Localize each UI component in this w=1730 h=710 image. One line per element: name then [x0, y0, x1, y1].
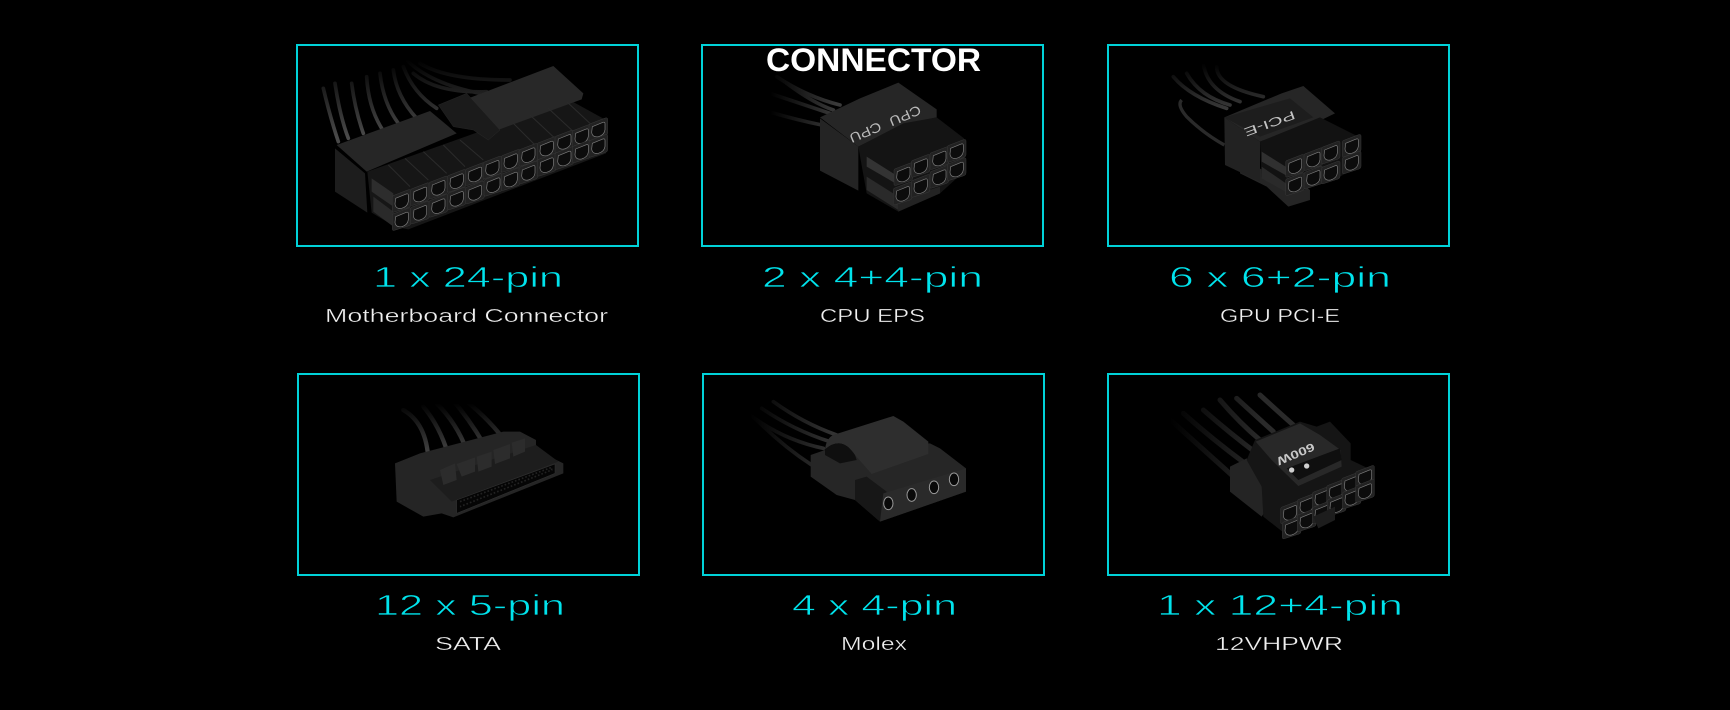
image frame: [298, 374, 639, 575]
panel: CPU EPS connector: [702, 42, 1043, 326]
icon: CPU connector: [768, 77, 966, 212]
pin count: 12 x 5-pin: [375, 590, 565, 622]
panel: GPU PCI-E connector: [1108, 45, 1449, 326]
image frame: [297, 45, 638, 246]
icon: PCI-E connector: [1173, 63, 1361, 207]
image frame: [703, 374, 1044, 575]
connector name: GPU PCI-E: [1220, 305, 1340, 326]
icon: 24-pin connector: [323, 60, 608, 230]
icon: SATA connector: [395, 393, 563, 517]
panel: Molex connector: [703, 374, 1044, 654]
icon: Molex connector: [750, 402, 966, 522]
icon: PCI-E connector: PCI-E: [1242, 108, 1297, 139]
image frame: [702, 45, 1043, 246]
panel: 24-pin motherboard connector: [297, 45, 638, 326]
panel: SATA connector: [298, 374, 639, 654]
icon: 12VHPWR connector: 600W: [1274, 440, 1316, 467]
connector name: Molex: [841, 633, 908, 654]
image frame: [1108, 374, 1449, 575]
icon: CPU connector: CPU: [847, 119, 884, 146]
panel: 12VHPWR connector: [1108, 374, 1449, 654]
connector name: Motherboard Connector: [325, 305, 608, 326]
connector name: 12VHPWR: [1215, 633, 1343, 654]
title: CONNECTOR: [766, 42, 981, 78]
pin count: 1 x 24-pin: [373, 262, 563, 294]
connector name: SATA: [435, 633, 502, 654]
icon: CPU connector: CPU: [887, 102, 923, 129]
pin count: 4 x 4-pin: [792, 590, 957, 622]
pin count: 6 x 6+2-pin: [1169, 262, 1391, 294]
icon: 12VHPWR connector: [1167, 395, 1374, 539]
image frame: [1108, 45, 1449, 246]
pin count: 1 x 12+4-pin: [1157, 590, 1403, 622]
connector name: CPU EPS: [820, 305, 925, 326]
pin count: 2 x 4+4-pin: [762, 262, 983, 294]
